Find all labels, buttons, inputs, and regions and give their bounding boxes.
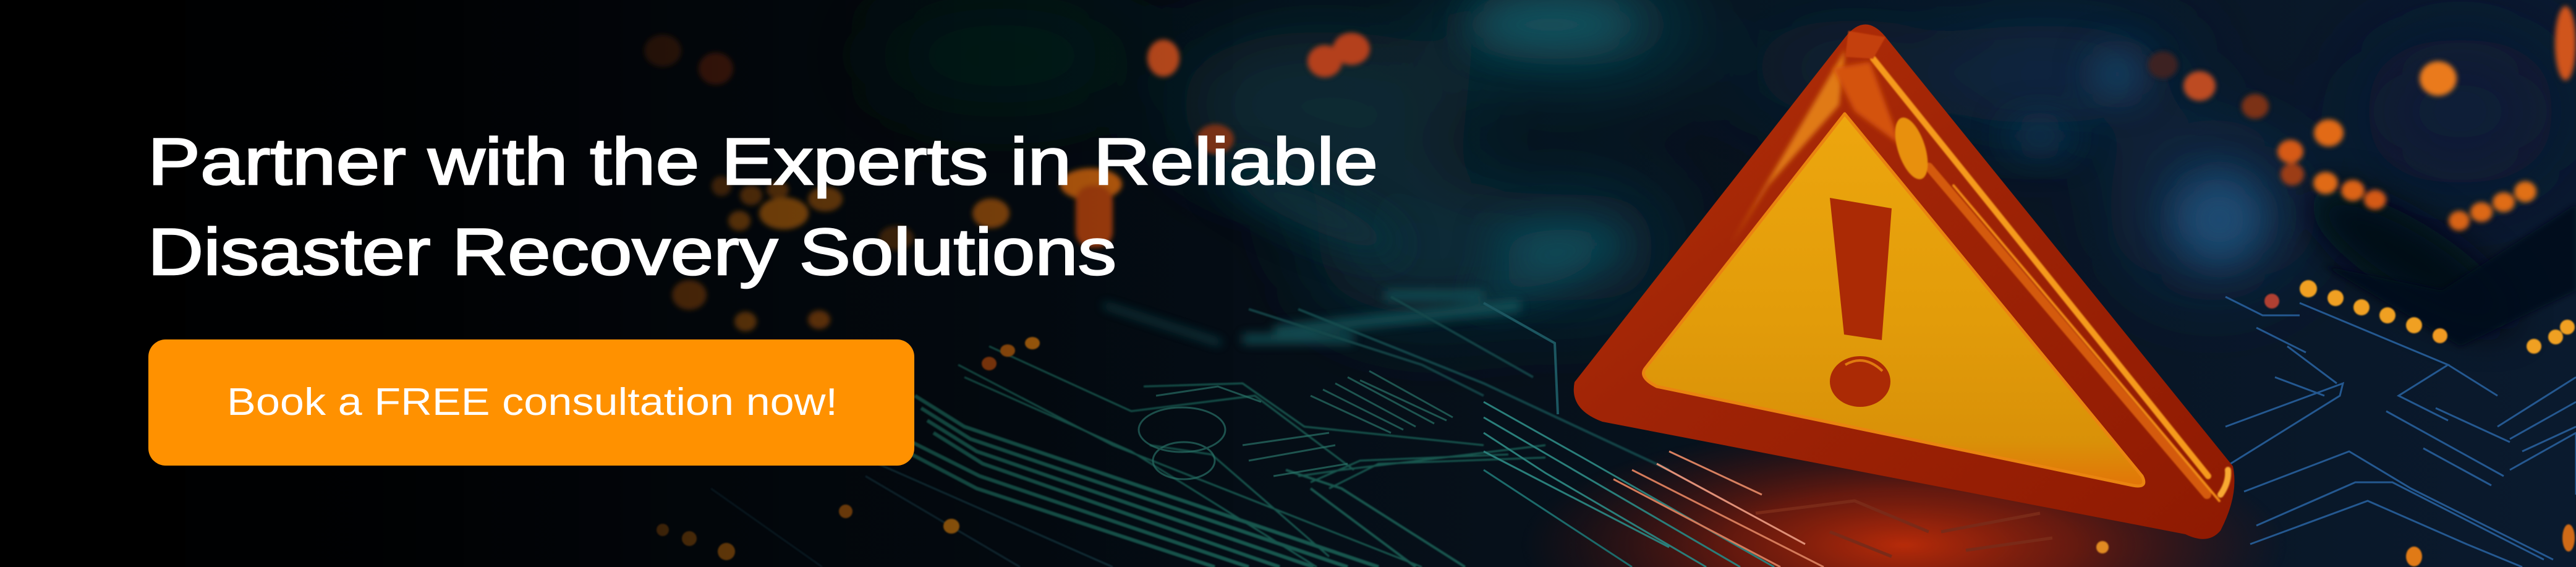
heading: Disaster Recovery Solutions bbox=[148, 215, 1116, 289]
circuit traces: component pads bbox=[1139, 371, 1453, 479]
heading: Partner with the Experts in Reliable bbox=[148, 124, 1378, 198]
yellow inner panel bbox=[1644, 114, 2144, 486]
glossy highlights on the rim bbox=[1873, 59, 2228, 501]
icon: warning triangle bbox=[1574, 24, 2234, 539]
mid circuit cluster bbox=[1103, 291, 1521, 346]
small sharp lights bbox=[657, 280, 2575, 566]
red reflection under the warning sign bbox=[1521, 371, 2287, 567]
circuit traces: lower right blue bbox=[2225, 297, 2576, 567]
left black fade bbox=[0, 0, 1236, 567]
triangle body bbox=[1574, 24, 2234, 539]
gloss spot bbox=[1889, 114, 1934, 183]
circuit traces: teal bundle bbox=[711, 297, 1669, 567]
exclamation mark bbox=[1830, 198, 1892, 407]
heading bbox=[148, 124, 1378, 289]
button: book a free consultation bbox=[148, 339, 914, 466]
dark chip on the right bbox=[2324, 204, 2576, 346]
out-of-focus orange lights bbox=[644, 6, 2576, 331]
button: book a free consultation: Book a FREE consultation now! bbox=[227, 381, 838, 424]
circuit traces: lower left of the sign bbox=[1484, 303, 2052, 567]
blurred teal and blue board haze bbox=[865, 0, 2559, 315]
